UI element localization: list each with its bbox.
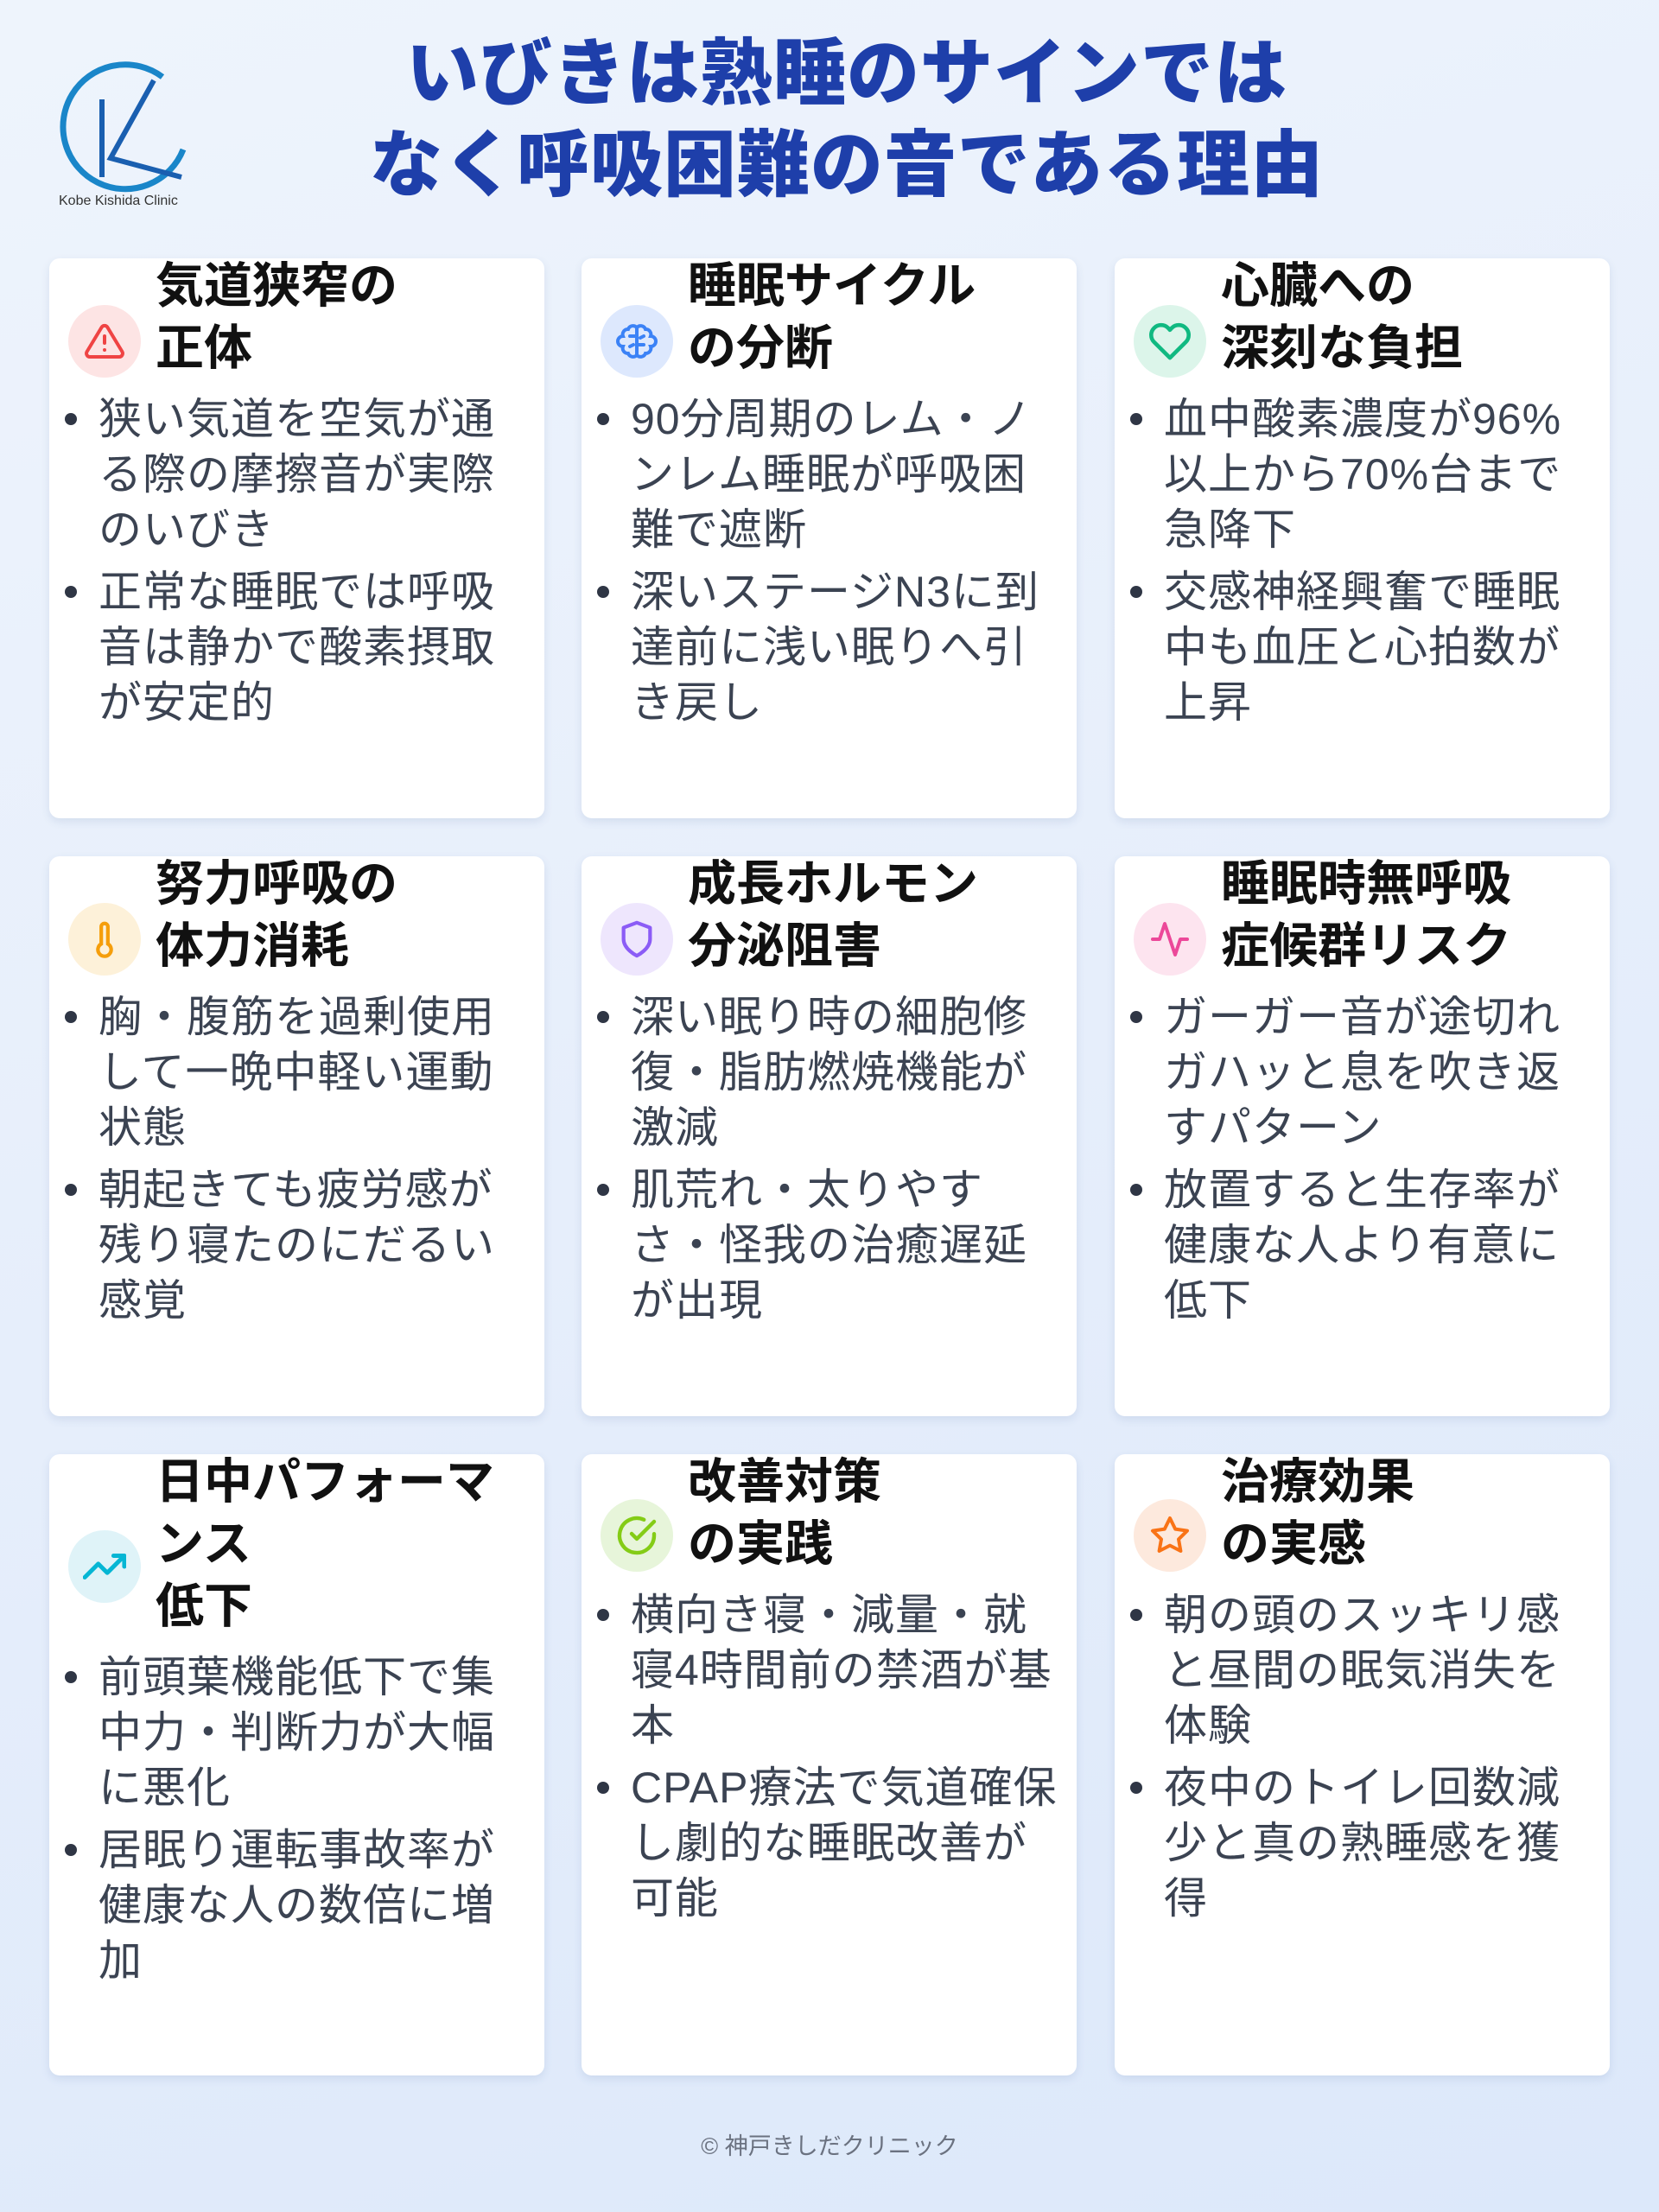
heading: [156, 258, 397, 375]
bullets: [597, 993, 1027, 1325]
bullets: 難で遮断: [631, 505, 807, 554]
bullets: 夜中のトイレ回数減: [1164, 1764, 1560, 1812]
bullets: 正常な睡眠では呼吸: [99, 568, 495, 616]
bullets: 体験: [1164, 1701, 1252, 1750]
title: なく呼吸困難の音である理由: [370, 124, 1324, 206]
heading: [1221, 258, 1463, 375]
heading: [688, 258, 976, 375]
bullets: [1130, 395, 1561, 727]
bullets: 中力・判断力が大幅: [99, 1708, 495, 1757]
bullets: 交感神経興奮で睡眠: [1164, 568, 1560, 616]
bullets: 達前に浅い眠りへ引: [631, 623, 1027, 671]
bullets: 朝起きても疲労感が: [99, 1166, 493, 1214]
heading: 深刻な負担: [1221, 321, 1463, 375]
heading: [156, 1454, 494, 1633]
bullets: る際の摩擦音が実際: [99, 450, 495, 499]
panel: 改善対策の実践: [582, 1454, 1077, 2075]
bullets: 居眠り運転事故率が: [99, 1826, 495, 1874]
bullets: 加: [99, 1936, 143, 1985]
heading: 気道狭窄の: [156, 258, 397, 313]
heading: [1221, 856, 1511, 973]
panel: 努力呼吸の体力消耗: [49, 856, 544, 1416]
heading: 分泌阻害: [688, 918, 881, 973]
bullets: 深い眠り時の細胞修: [631, 993, 1027, 1041]
icon: thermometer: [68, 903, 141, 976]
heading: 低下: [156, 1579, 252, 1633]
bullets: 感覚: [99, 1276, 187, 1325]
bullets: 中も血圧と心拍数が: [1164, 623, 1560, 671]
bullets: [597, 395, 1039, 727]
bullets: さ・怪我の治癒遅延: [631, 1221, 1027, 1269]
bullets: 状態: [99, 1103, 187, 1152]
heading: 治療効果: [1221, 1454, 1414, 1509]
panel: 成長ホルモン分泌阻害: [582, 856, 1077, 1416]
bullets: [1130, 993, 1560, 1325]
bullets: 横向き寝・減量・就: [631, 1591, 1027, 1639]
heading: ンス: [156, 1516, 251, 1571]
heading: 症候群リスク: [1221, 918, 1511, 973]
bullets: き戻し: [631, 678, 763, 727]
panel: 気道狭窄の正体: [49, 258, 544, 818]
heading: 成長ホルモン: [688, 856, 978, 911]
bullets: ガハッと息を吹き返: [1164, 1048, 1560, 1096]
bullets: 残り寝たのにだるい: [99, 1221, 495, 1269]
bullets: 肌荒れ・太りやす: [631, 1166, 983, 1214]
panel: 睡眠時無呼吸症候群リスク: [1115, 856, 1610, 1416]
bullets: すパターン: [1164, 1103, 1382, 1152]
panel: 睡眠サイクルの分断: [582, 258, 1077, 818]
icon: check: [601, 1499, 673, 1572]
footer: © 神戸きしだクリニック: [701, 2133, 958, 2159]
heading: [156, 856, 397, 973]
icon: trending up: [68, 1530, 141, 1603]
icon: shield: [601, 903, 673, 976]
bullets: 放置すると生存率が: [1164, 1166, 1560, 1214]
icon: star: [1134, 1499, 1206, 1572]
bullets: 得: [1164, 1874, 1208, 1923]
bullets: 以上から70%台まで: [1164, 450, 1561, 499]
panel: 治療効果の実感: [1115, 1454, 1610, 2075]
bullets: 急降下: [1164, 505, 1296, 554]
heading: の実感: [1221, 1516, 1366, 1571]
bullets: 音は静かで酸素摂取: [99, 623, 495, 671]
icon: activity: [1134, 903, 1206, 976]
bullets: ガーガー音が途切れ: [1164, 993, 1560, 1041]
panel: 日中パフォーマンス低下: [49, 1454, 544, 2075]
bullets: [65, 395, 495, 727]
bullets: 低下: [1164, 1276, 1252, 1325]
bullets: 90分周期のレム・ノ: [631, 395, 1033, 443]
bullets: 血中酸素濃度が96%: [1164, 395, 1561, 443]
heading: 心臓への: [1221, 258, 1414, 313]
bullets: [597, 1591, 1057, 1923]
bullets: 少と真の熟睡感を獲: [1164, 1819, 1560, 1867]
logo: Kobe Kishida Clinic: [59, 194, 178, 208]
heading: 日中パフォーマ: [156, 1454, 494, 1509]
bullets: 前頭葉機能低下で集: [99, 1653, 495, 1701]
heading: 改善対策: [688, 1454, 881, 1509]
bullets: 健康な人より有意に: [1164, 1221, 1560, 1269]
bullets: 朝の頭のスッキリ感: [1164, 1591, 1560, 1639]
bullets: [1130, 1591, 1560, 1923]
bullets: [65, 993, 495, 1325]
bullets: 胸・腹筋を過剰使用: [99, 993, 495, 1041]
panel: 心臓への深刻な負担: [1115, 258, 1610, 818]
heading: 睡眠サイクル: [688, 258, 976, 313]
logo: [59, 61, 187, 208]
icon: heart: [1134, 305, 1206, 378]
heading: [688, 1454, 881, 1571]
bullets: 可能: [631, 1874, 719, 1923]
bullets: 復・脂肪燃焼機能が: [631, 1048, 1027, 1096]
bullets: 狭い気道を空気が通: [99, 395, 495, 443]
bullets: 健康な人の数倍に増: [99, 1881, 495, 1929]
bullets: 上昇: [1164, 678, 1252, 727]
heading: [688, 856, 978, 973]
heading: [1221, 1454, 1414, 1571]
icon: brain: [601, 305, 673, 378]
bullets: が安定的: [99, 678, 275, 727]
title: いびきは熟睡のサインでは: [406, 33, 1287, 114]
heading: の分断: [688, 321, 833, 375]
heading: 睡眠時無呼吸: [1221, 856, 1511, 911]
heading: 体力消耗: [156, 918, 349, 973]
bullets: のいびき: [99, 505, 275, 554]
bullets: [65, 1653, 495, 1985]
bullets: 本: [631, 1701, 675, 1750]
bullets: CPAP療法で気道確保: [631, 1764, 1057, 1812]
heading: 努力呼吸の: [156, 856, 397, 911]
heading: の実践: [688, 1516, 833, 1571]
bullets: 激減: [631, 1103, 719, 1152]
bullets: 深いステージN3に到: [631, 568, 1039, 616]
bullets: ンレム睡眠が呼吸困: [631, 450, 1027, 499]
bullets: して一晩中軽い運動: [99, 1048, 494, 1096]
heading: 正体: [156, 321, 252, 375]
bullets: し劇的な睡眠改善が: [631, 1819, 1027, 1867]
icon: warning: [68, 305, 141, 378]
bullets: に悪化: [99, 1764, 231, 1812]
bullets: が出現: [631, 1276, 763, 1325]
title: [370, 33, 1324, 206]
bullets: と昼間の眠気消失を: [1164, 1646, 1560, 1694]
bullets: 寝4時間前の禁酒が基: [631, 1646, 1052, 1694]
